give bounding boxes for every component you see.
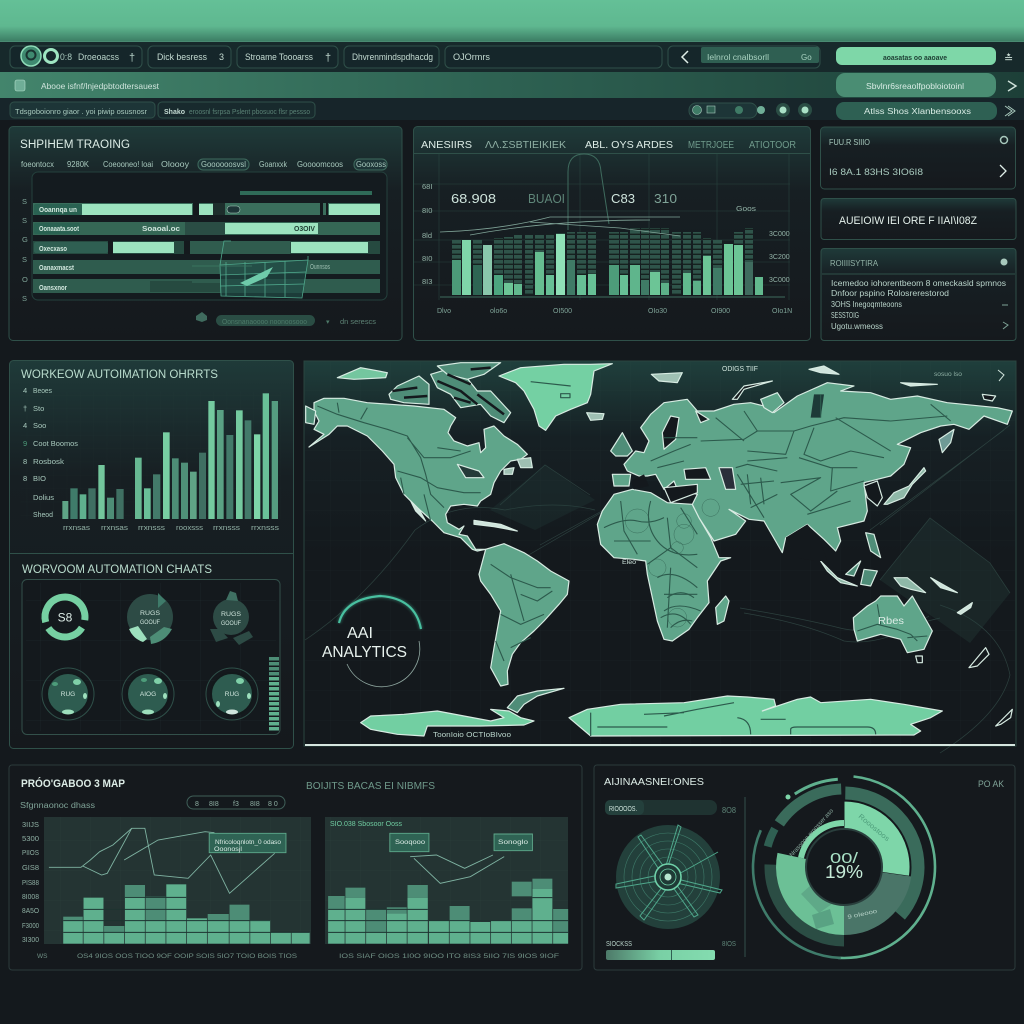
Greenland bbox=[499, 364, 612, 430]
top meter: RIOOOOS. bbox=[609, 806, 637, 813]
secondary banner: Sbvlnr6sreaolfpobloiotoinl bbox=[866, 81, 964, 91]
y labels: F3000 bbox=[22, 923, 39, 930]
AI analytics badge: AAI bbox=[347, 625, 373, 642]
y labels bbox=[22, 822, 40, 944]
inland seas bbox=[457, 394, 827, 561]
histogram 2 bbox=[328, 879, 568, 944]
y axis labels: 68I bbox=[422, 182, 432, 191]
panel: process map: Sfgnnaonoc dhass bbox=[20, 801, 95, 810]
South America bbox=[479, 544, 569, 686]
map background shapes bbox=[305, 425, 1010, 753]
gantt rows: S bbox=[22, 197, 27, 206]
range control: f3 bbox=[233, 801, 239, 808]
filter bar: Atlss Shos Xlanbensooxs bbox=[864, 107, 971, 116]
navigation bar: 0:8 bbox=[60, 52, 72, 62]
panel: notes list: SESSTOIG bbox=[831, 311, 859, 320]
range control: 8I8 bbox=[209, 801, 219, 808]
x axis labels: olo6o bbox=[490, 308, 507, 315]
tab headings: ANESIIRS bbox=[421, 139, 472, 151]
filter bar: Tdsgoboionro giaor . yoi piwip osusnosr bbox=[15, 107, 148, 116]
x axis labels: OI500 bbox=[553, 308, 572, 315]
Iberia bbox=[612, 474, 631, 486]
donut chart bbox=[722, 745, 966, 989]
navigation bar: Droeoacss bbox=[78, 52, 119, 62]
gantt rows: Oxecxaso bbox=[39, 246, 67, 253]
panel: shipment tracking bbox=[9, 126, 402, 340]
navigation bar: † bbox=[129, 52, 135, 64]
y labels: 5300 bbox=[22, 836, 39, 843]
y labels: Sto bbox=[33, 404, 44, 413]
y labels: PIS88 bbox=[22, 880, 39, 887]
panel: automation zones: PO AK bbox=[978, 779, 1004, 789]
gantt rows: O3OIV bbox=[294, 226, 315, 233]
gauge: third: GOOUF bbox=[221, 620, 241, 627]
secondary banner: Abooe isfnf/lnjedpbtodtersauest bbox=[41, 81, 160, 91]
histogram 1 bbox=[63, 884, 310, 944]
map labels: sosuo lso bbox=[934, 372, 963, 378]
tab row: Goooooosvsl bbox=[201, 160, 246, 169]
navigation bar: aoasatas oo aaoave bbox=[883, 53, 947, 62]
gantt rows: G bbox=[22, 235, 28, 244]
map labels: ODIGS TIIF bbox=[722, 366, 758, 373]
continents bbox=[306, 363, 1012, 736]
y labels: 8I008 bbox=[22, 894, 39, 901]
panel: process map: Nfricoloqnlotn_0 odaso bbox=[215, 840, 282, 846]
Antarctica bbox=[569, 696, 942, 736]
panel: process map: Ooonosjl bbox=[214, 847, 242, 853]
map labels: Eleo bbox=[622, 559, 636, 566]
big values: BUAOI bbox=[528, 191, 565, 206]
tab row: Gooxoss bbox=[356, 160, 386, 169]
panel: automation callout bbox=[821, 198, 1016, 240]
radial gauge 1: RUG bbox=[61, 691, 75, 698]
gantt rows: Ooannqa un bbox=[39, 207, 77, 214]
filter bar: Shako bbox=[164, 107, 185, 116]
x labels: rrxnsas bbox=[63, 525, 91, 532]
panel: status card bbox=[820, 127, 1016, 189]
light bars bbox=[452, 234, 763, 295]
panel: automation callout: AUEIOIW IEI ORE F IIAI\I08Z bbox=[839, 215, 977, 227]
x labels: rrxnsss bbox=[138, 525, 166, 532]
x labels: WS bbox=[37, 953, 48, 960]
pagination footer: dn serescs bbox=[340, 317, 376, 326]
y labels: Coot Boomos bbox=[33, 439, 78, 448]
gauge: second: GOOUF bbox=[140, 619, 160, 626]
stacked dark bars bbox=[452, 228, 753, 295]
tab headings: ΛΛ.ΣSBTIEIKIEK bbox=[485, 139, 566, 151]
Eurasia bbox=[624, 383, 1012, 553]
navigation bar: Stroame Toooarss bbox=[245, 52, 313, 62]
panel: process map: Sooqooo bbox=[395, 840, 426, 846]
AI analytics badge bbox=[322, 596, 421, 687]
y labels: Beoes bbox=[33, 386, 52, 395]
Africa bbox=[597, 489, 731, 641]
x labels: rrxnsss bbox=[213, 525, 241, 532]
x labels: rooxsss bbox=[176, 525, 204, 532]
gantt rows: Oonaaata.soot bbox=[39, 226, 80, 233]
gantt rows: Oanaxmacst bbox=[39, 265, 75, 272]
gantt rows: Ounnsos bbox=[310, 264, 330, 271]
pagination footer: ▾ bbox=[326, 319, 330, 326]
tab row: foeontocx bbox=[21, 160, 54, 169]
tab headings: ATIOTOOR bbox=[749, 139, 796, 151]
panel: notes list: Ugotu.wmeoss bbox=[831, 322, 883, 331]
North America bbox=[309, 398, 527, 551]
y labels: 9 bbox=[23, 439, 27, 448]
navigation bar: 3 bbox=[219, 52, 224, 62]
y labels: Soo bbox=[33, 421, 46, 430]
panel: automation zones bbox=[594, 745, 1015, 989]
panel: status card: I6 8A.1 83HS 3IO6I8 bbox=[829, 167, 923, 177]
x axis labels bbox=[437, 308, 792, 315]
map base line bbox=[305, 744, 1015, 746]
tab headings bbox=[421, 139, 796, 151]
borders bbox=[317, 403, 697, 661]
y labels: Rosbosk bbox=[33, 457, 64, 466]
tab row: Coeooneo! loai bbox=[103, 160, 153, 169]
gantt rows bbox=[22, 197, 380, 303]
x labels: rrxnsss bbox=[251, 525, 280, 532]
small islands bbox=[411, 366, 1012, 726]
tab headings: METRJOEE bbox=[688, 139, 734, 151]
big values: 310 bbox=[654, 191, 677, 206]
filter bar: eroosnl fsrpsa Pslent pbosuoc flsr pessso bbox=[189, 109, 310, 116]
y labels: 4 bbox=[23, 421, 27, 430]
y labels: PIIOS bbox=[22, 850, 39, 857]
gantt rows: Oansxnor bbox=[39, 285, 67, 292]
map labels: ToonIoio OCTIoBIvoo bbox=[433, 732, 511, 739]
y axis labels: 8I0 bbox=[422, 254, 432, 263]
x labels bbox=[37, 953, 559, 960]
navigation bar: Dick besress bbox=[157, 52, 207, 62]
x labels: OS4 9IOS OOS TIOO 9OF OOIP SOIS 5IO7 TOIO BOIS TIOS bbox=[77, 953, 298, 960]
donut chart: Rooostoos bbox=[857, 813, 891, 843]
inner wedges bbox=[844, 801, 910, 876]
wireframe shipping box bbox=[192, 241, 308, 298]
range control: 8 bbox=[195, 801, 199, 808]
range control bbox=[187, 796, 285, 809]
y labels: Sheod bbox=[33, 510, 53, 519]
filter bar bbox=[0, 98, 1024, 120]
radar bbox=[616, 825, 722, 929]
donut chart: 00/ bbox=[830, 850, 859, 867]
y axis labels: 8ld bbox=[422, 231, 432, 240]
heading: process map: PRÓO'GABOO 3 MAP bbox=[21, 777, 125, 790]
line overlay 1 bbox=[49, 828, 286, 893]
y axis labels: 8I0 bbox=[422, 206, 432, 215]
radial gauge 3 bbox=[206, 668, 258, 720]
panel: notes list: 3OHS Inegoqmteoons bbox=[831, 300, 902, 309]
Australia bbox=[853, 596, 932, 653]
tab row bbox=[21, 159, 387, 170]
trend lines bbox=[440, 217, 680, 236]
Madagascar bbox=[716, 596, 729, 624]
navigation bar: Ielnrol cnalbsorll bbox=[707, 53, 769, 62]
navigation bar: † bbox=[325, 52, 331, 64]
navigation bar bbox=[0, 41, 1024, 72]
radial gauge 3: RUG bbox=[225, 691, 239, 698]
tab row: Oloooy bbox=[161, 160, 189, 169]
tab row: 9280K bbox=[67, 160, 90, 169]
panel: status card: FUU.R SIIIO bbox=[829, 137, 870, 147]
gauge: third bbox=[210, 591, 253, 645]
Iceland and Svalbard bbox=[587, 373, 682, 420]
x axis labels: Dlvo bbox=[437, 308, 451, 315]
radial gauge 2: AIOG bbox=[140, 691, 156, 698]
gauge: second: RUGS bbox=[140, 610, 161, 617]
radial gauge 1 bbox=[42, 668, 94, 720]
heading: tracking: SHPIHEM TRAOING bbox=[20, 139, 130, 151]
big values bbox=[451, 191, 677, 206]
panel: workflow automation bbox=[10, 360, 294, 748]
y labels: 3I300 bbox=[22, 937, 39, 944]
pagination footer bbox=[196, 312, 376, 326]
y labels: GIS8 bbox=[22, 865, 39, 872]
gantt rows: S bbox=[22, 216, 27, 225]
gauge frame bbox=[22, 580, 280, 734]
x labels: rrxnsas bbox=[101, 525, 129, 532]
navigation bar: Dhvrenmindspdhacdg bbox=[352, 52, 433, 62]
donut chart: Nrasonoe eroosser aso bbox=[789, 808, 835, 858]
header band bbox=[0, 0, 1024, 42]
panel: world map bbox=[304, 361, 1016, 753]
x labels: IOS SIAF OIOS 1I0O 9IOO ITO 8IS3 5IIO 7IS 9IOS 9IOF bbox=[339, 953, 559, 960]
y labels: BIO bbox=[33, 474, 46, 483]
y axis labels bbox=[422, 182, 432, 286]
line overlay 2 bbox=[390, 833, 532, 883]
gauge: third: RUGS bbox=[221, 611, 242, 618]
secondary banner bbox=[0, 72, 1024, 98]
panel: notes list bbox=[821, 248, 1016, 340]
x axis labels: OI900 bbox=[711, 308, 730, 315]
heading: workflow gauges: WORVOOM AUTOMATION CHAATS bbox=[22, 564, 212, 576]
gauge: S8 bbox=[37, 589, 93, 645]
y labels: 8 bbox=[23, 474, 27, 483]
AI analytics badge: ANALYTICS bbox=[322, 644, 407, 661]
outer rings bbox=[722, 745, 966, 989]
navigation bar: ≛ bbox=[1004, 52, 1013, 65]
gauge: second bbox=[127, 593, 173, 644]
y labels: † bbox=[23, 404, 27, 413]
gantt rows: S bbox=[22, 255, 27, 264]
range control: 8 0 bbox=[268, 801, 278, 808]
pagination footer: Oonsnanaoooo noonoosooo bbox=[222, 319, 307, 326]
donut chart: 9 oIeooo bbox=[847, 909, 879, 921]
big values: 68.908 bbox=[451, 191, 496, 206]
arctic gaps bbox=[392, 368, 504, 414]
right axis labels bbox=[769, 231, 790, 284]
panel: process map bbox=[9, 765, 582, 970]
gauge: S8: S8 bbox=[58, 610, 73, 624]
y labels: Dolius bbox=[33, 493, 54, 502]
panel: process map: BOIJITS BACAS EI NIBMFS bbox=[306, 781, 435, 792]
panel: process map: Sonoglo bbox=[498, 840, 529, 846]
navigation bar: Go bbox=[801, 53, 812, 62]
map labels bbox=[433, 366, 963, 739]
x axis labels: OIo30 bbox=[648, 308, 667, 315]
radial gauge 2 bbox=[122, 668, 174, 720]
x axis labels: OIo1N bbox=[772, 308, 792, 315]
ladder scale bbox=[269, 657, 279, 730]
bottom meter: 8IOS bbox=[722, 941, 736, 948]
tab row: Goooomcoos bbox=[297, 160, 343, 169]
range control: 8I8 bbox=[250, 801, 260, 808]
gantt rows: Soaoal.oc bbox=[142, 226, 180, 233]
right axis labels: 3C000 bbox=[769, 277, 790, 284]
top meter: 8O8 bbox=[722, 806, 737, 815]
panel: analytics bars: Goos bbox=[736, 204, 756, 213]
heading: workflow bars: WORKEOW AUTOIMATION OHRRTS bbox=[21, 369, 218, 381]
right axis labels: 3C000 bbox=[769, 231, 790, 238]
y labels bbox=[23, 386, 78, 519]
y labels: 8A5O bbox=[22, 908, 40, 915]
panel: analytics bars bbox=[414, 126, 810, 340]
panel: process map: SIO.038 Sbosoor Ooss bbox=[330, 821, 402, 828]
Britain bbox=[611, 433, 632, 456]
top meter bbox=[605, 800, 737, 815]
gantt rows: S bbox=[22, 294, 27, 303]
tab row: Goanxxk bbox=[259, 160, 288, 169]
y labels: 8 bbox=[23, 457, 27, 466]
bottom meter bbox=[606, 941, 736, 960]
big values: C83 bbox=[611, 191, 635, 206]
bottom meter: SIOCKSS bbox=[606, 941, 632, 948]
y axis labels: 8I3 bbox=[422, 277, 432, 286]
panel: notes list: ROIIIISYTIRA bbox=[830, 258, 878, 268]
right axis labels: 3C200 bbox=[769, 254, 790, 261]
x labels bbox=[63, 525, 280, 532]
y labels: 4 bbox=[23, 386, 27, 395]
panel: notes list: Dnfoor pspino Rolosrerestorod bbox=[831, 289, 949, 298]
Arctic islands bbox=[306, 363, 532, 474]
navigation bar: OJOrmrs bbox=[453, 52, 490, 62]
gantt rows: O bbox=[22, 275, 28, 284]
bar chart bbox=[21, 392, 281, 519]
y labels: 3IIJS bbox=[22, 822, 39, 829]
panel: notes list: Icemedoo iohorentbeom 8 omeckasld spmnos bbox=[831, 279, 1006, 288]
tab headings: ABL. OYS ARDES bbox=[585, 139, 673, 151]
donut chart: 19% bbox=[825, 862, 863, 882]
heading: automation zones: AIJINAASNEI:ONES bbox=[604, 776, 704, 788]
map labels: Rbes bbox=[878, 615, 904, 627]
